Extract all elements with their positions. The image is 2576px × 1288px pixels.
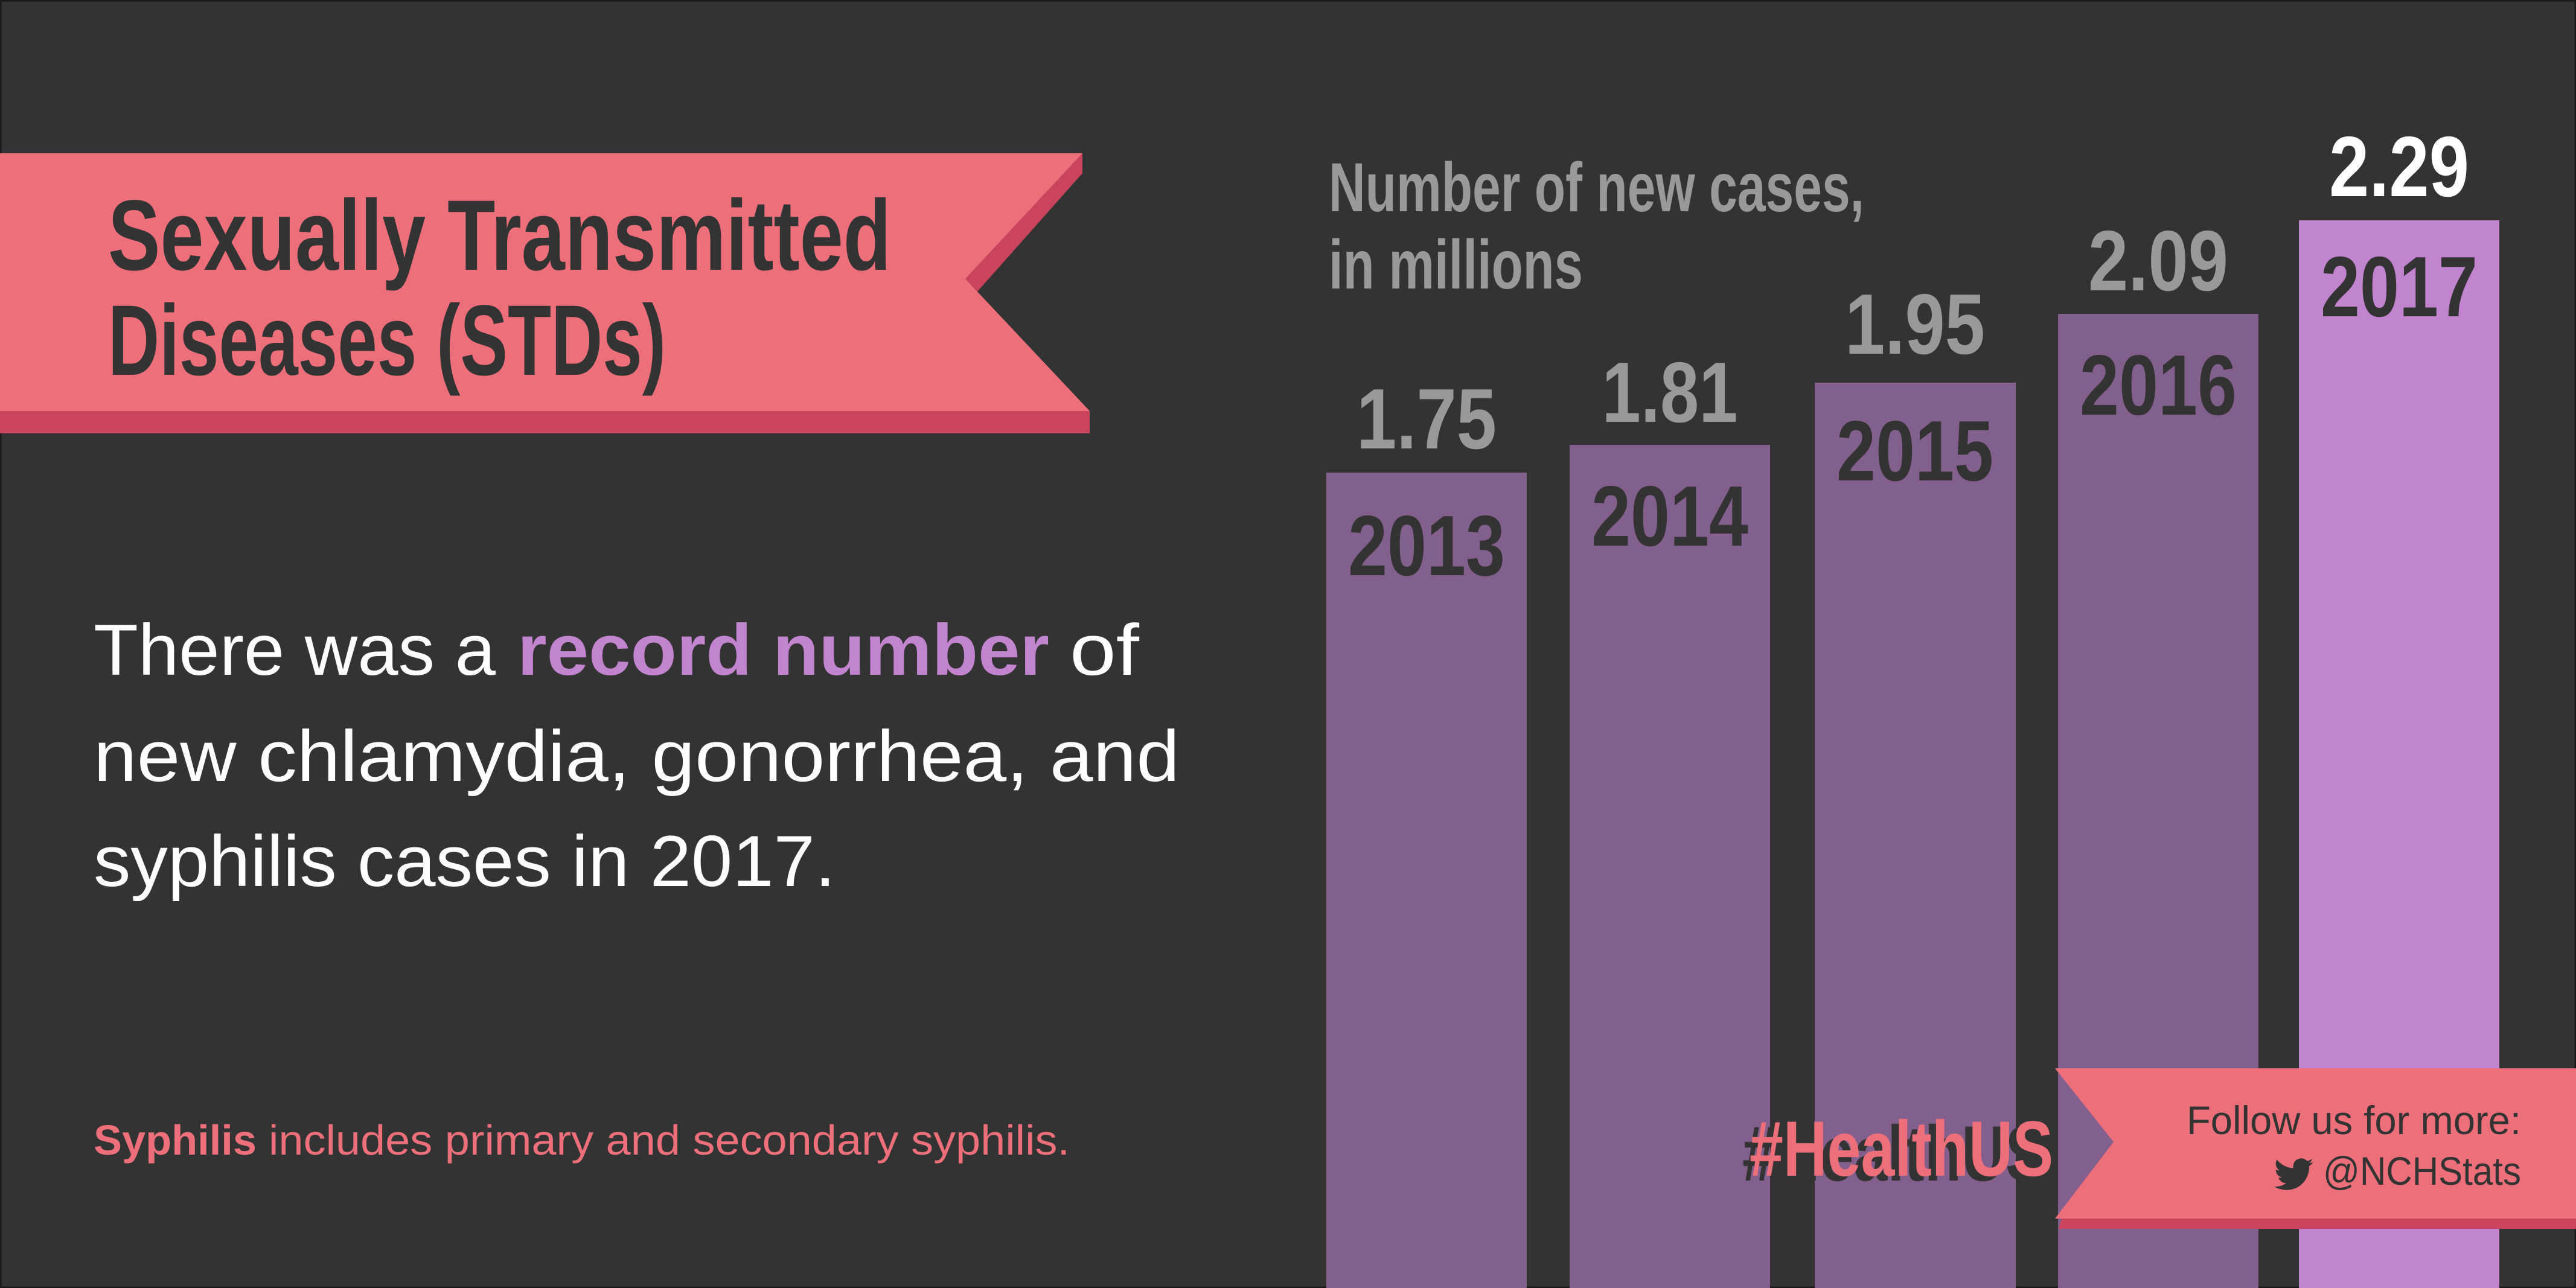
follow text [2187, 1098, 2521, 1193]
bar 2015: 2015 [1836, 403, 1993, 499]
chart axis title: Number of new cases, [1329, 149, 1864, 226]
bar 2017: 2.29 [2329, 119, 2469, 215]
bar 2013: 2013 [1348, 498, 1505, 594]
bar 2013 [1326, 371, 1527, 1288]
main statement text: of [1070, 610, 1140, 690]
footnote: includes primary and secondary syphilis. [269, 1117, 1070, 1164]
chart axis title [1329, 149, 1864, 304]
bar 2016: 2016 [2080, 337, 2237, 433]
main statement text: syphilis cases in 2017. [94, 821, 836, 902]
bar 2013: 1.75 [1357, 371, 1497, 467]
icon: twitter bird [2274, 1158, 2313, 1190]
bar 2017 [2299, 119, 2499, 1288]
title text [108, 180, 891, 397]
bar chart [1326, 119, 2499, 1288]
bar 2014 [1570, 345, 1770, 1288]
follow text: @NCHStats [2323, 1149, 2521, 1193]
bar 2016: 2.09 [2088, 213, 2228, 309]
footnote: Syphilis [94, 1117, 257, 1164]
bar 2017: 2017 [2321, 239, 2478, 335]
chart axis title: in millions [1329, 226, 1583, 304]
title text: Diseases (STDs) [108, 285, 666, 397]
bar 2015 [1815, 276, 2016, 1288]
main statement text: There was a [94, 610, 496, 690]
bar 2016 [2058, 213, 2258, 1288]
main statement text: record number [517, 610, 1049, 690]
title banner [0, 153, 1090, 433]
bar 2014: 2014 [1591, 468, 1748, 564]
title text: Sexually Transmitted [108, 180, 891, 292]
bar 2014: 1.81 [1602, 345, 1737, 441]
hashtag: #HealthUS [1750, 1105, 2053, 1193]
bar 2015: 1.95 [1845, 276, 1985, 372]
follow banner [2055, 1068, 2576, 1229]
follow text: Follow us for more: [2187, 1098, 2521, 1143]
main statement text [94, 610, 1180, 902]
hashtag: #HealthUS [1742, 1109, 2046, 1197]
main statement text: new chlamydia, gonorrhea, and [94, 716, 1180, 797]
